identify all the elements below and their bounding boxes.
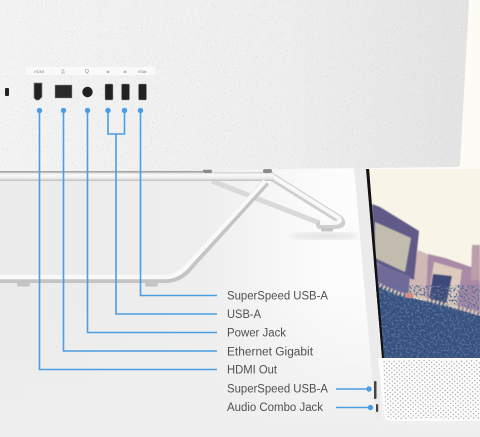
port label strip bbox=[26, 67, 155, 75]
monitor back panel bbox=[0, 0, 470, 172]
label: Power Jack: Power Jack bbox=[227, 328, 286, 340]
port: USB-A 2 bbox=[122, 84, 130, 100]
top tube bbox=[0, 172, 274, 181]
line: side SuperSpeed USB-A bbox=[336, 388, 369, 390]
side port: SuperSpeed USB-A bbox=[374, 381, 376, 399]
line: HDMI Out bbox=[40, 111, 217, 370]
ports bbox=[5, 83, 146, 100]
label: SuperSpeed USB-A: SuperSpeed USB-A bbox=[227, 290, 328, 302]
port label strip: HDMI bbox=[34, 69, 44, 74]
callout lines bbox=[40, 111, 370, 408]
side port: audio jack bbox=[376, 404, 378, 412]
speaker base bbox=[378, 358, 480, 421]
port label strip: 品 bbox=[61, 69, 65, 74]
label: Ethernet Gigabit: Ethernet Gigabit bbox=[227, 346, 314, 358]
port label strip: ⇄ bbox=[106, 69, 110, 74]
front tube bbox=[0, 182, 266, 279]
port label strip: Q bbox=[85, 69, 89, 75]
port: security slot bbox=[5, 88, 9, 96]
label: Audio Combo Jack: Audio Combo Jack bbox=[227, 402, 323, 414]
port: ethernet bbox=[55, 85, 72, 98]
line: side Audio Combo Jack bbox=[336, 406, 370, 408]
port: USB-A 1 bbox=[105, 84, 113, 100]
callout dots bbox=[37, 108, 373, 410]
line: Ethernet Gigabit bbox=[64, 111, 217, 351]
monitor side strip bbox=[354, 168, 381, 420]
back tube bbox=[212, 181, 322, 224]
port label strip: ⇄ bbox=[123, 69, 127, 74]
hedge bbox=[376, 283, 480, 360]
stand bbox=[0, 169, 360, 286]
port: HDMI bbox=[34, 83, 42, 100]
line: SuperSpeed USB-A bbox=[140, 111, 217, 296]
screen bezel edge bbox=[365, 168, 384, 358]
port: SuperSpeed USB-A bbox=[138, 84, 146, 100]
building silhouette bbox=[372, 204, 480, 316]
feet bbox=[17, 283, 30, 286]
side ports bbox=[374, 381, 378, 412]
line: Power Jack bbox=[88, 111, 217, 332]
label: USB-A: USB-A bbox=[227, 309, 261, 321]
port labels bbox=[227, 290, 328, 414]
label: side SuperSpeed USB-A: SuperSpeed USB-A bbox=[227, 384, 328, 396]
screen photo bbox=[360, 165, 480, 360]
shadow bbox=[290, 233, 360, 239]
port: power jack bbox=[82, 87, 93, 97]
label: HDMI Out: HDMI Out bbox=[227, 364, 278, 376]
line: USB-A bbox=[108, 111, 217, 314]
port label strip: SS⇄ bbox=[138, 69, 147, 74]
